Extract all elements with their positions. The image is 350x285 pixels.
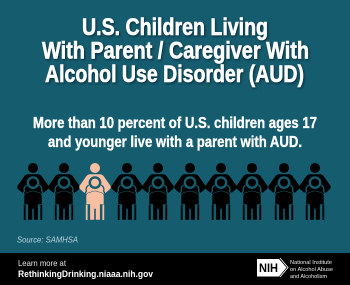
footer bar (0, 253, 350, 285)
footer link text: RethinkingDrinking.niaaa.nih.gov (18, 269, 154, 280)
footer link text (18, 259, 154, 280)
NIH logo: NIH (259, 263, 278, 275)
title: U.S. Children Living (82, 14, 268, 41)
source note: Source: SAMHSA (17, 234, 78, 244)
NIAAA name: on Alcohol Abuse (290, 267, 333, 273)
NIH logo (257, 258, 288, 277)
title (42, 14, 309, 88)
NIAAA name (290, 260, 333, 280)
pictogram row: 1 in 10 children highlighted (17, 163, 331, 220)
subtitle statistic text: and younger live with a parent with AUD. (48, 134, 302, 151)
NIAAA name: National Institute (290, 260, 332, 266)
footer link text: Learn more at (18, 259, 67, 268)
NIAAA name: and Alcoholism (290, 274, 327, 280)
subtitle statistic text (33, 115, 317, 151)
